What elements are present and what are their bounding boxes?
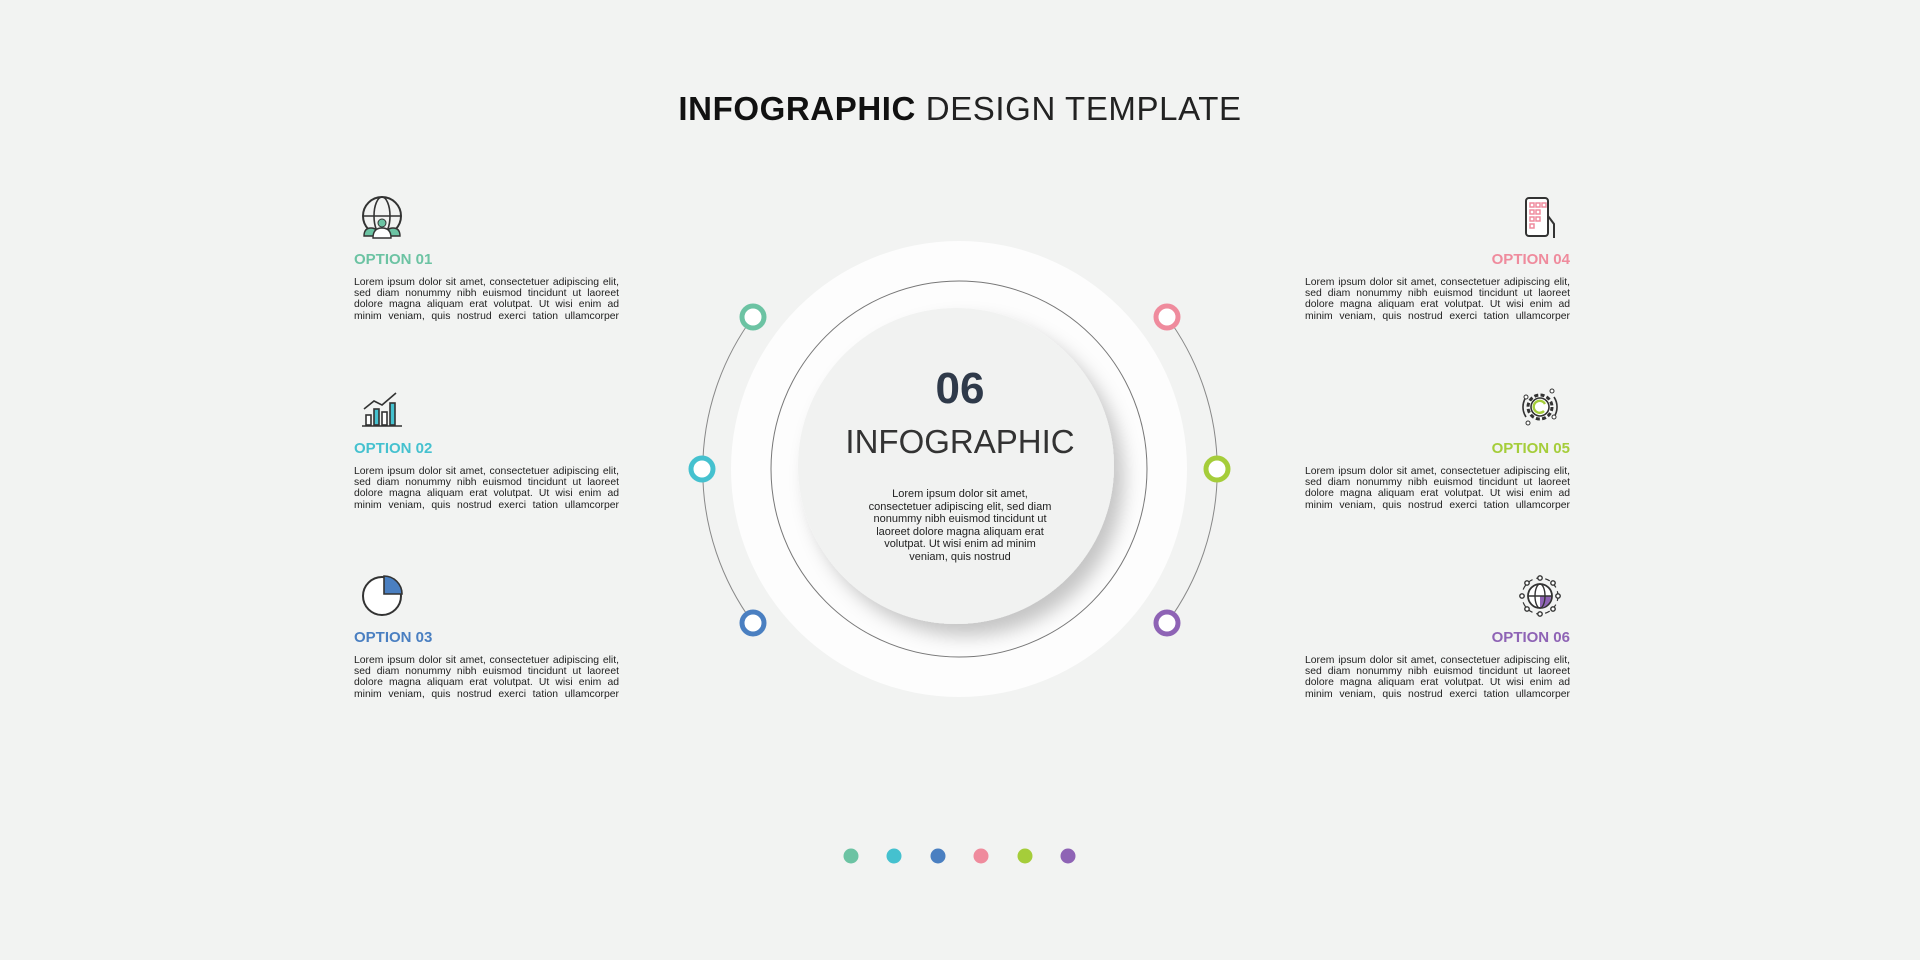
option 02: OPTION 02 xyxy=(354,440,432,457)
option 04: OPTION 04 xyxy=(1492,251,1570,268)
option 01 xyxy=(354,196,619,322)
center number: 06 xyxy=(936,364,984,413)
option 06: OPTION 06 xyxy=(1492,629,1570,646)
dot markers xyxy=(691,306,1228,634)
option 04: Lorem ipsum dolor sit amet, consectetuer adipiscing elit, sed diam nonummy nibh euismod tincidunt ut laoreet dolore magna aliquam erat volutpat. Ut wisi enim ad minim veniam, quis nostrud exerci tation ullamcorper xyxy=(1305,277,1570,322)
inner raised circle xyxy=(798,308,1114,624)
center heading: INFOGRAPHIC xyxy=(845,423,1075,460)
option 02: Lorem ipsum dolor sit amet, consectetuer adipiscing elit, sed diam nonummy nibh euismod tincidunt ut laoreet dolore magna aliquam erat volutpat. Ut wisi enim ad minim veniam, quis nostrud exerci tation ullamcorper xyxy=(354,466,619,511)
icon: bar chart xyxy=(362,392,402,427)
option 05: OPTION 05 xyxy=(1492,440,1570,457)
outer white circle xyxy=(731,241,1187,697)
center body text: Lorem ipsum dolor sit amet, consectetuer adipiscing elit, sed diam nonummy nibh euismod tincidunt ut laoreet dolore magna aliquam erat volutpat. Ut wisi enim ad minim veniam, quis nostrud xyxy=(869,488,1051,563)
arcs xyxy=(703,317,753,623)
icon: globe people xyxy=(362,196,402,239)
option 01: OPTION 01 xyxy=(354,251,432,268)
option 03: Lorem ipsum dolor sit amet, consectetuer adipiscing elit, sed diam nonummy nibh euismod tincidunt ut laoreet dolore magna aliquam erat volutpat. Ut wisi enim ad minim veniam, quis nostrud exerci tation ullamcorper xyxy=(354,655,619,700)
title: INFOGRAPHIC DESIGN TEMPLATE xyxy=(678,90,1242,127)
color legend dots xyxy=(844,848,1076,864)
icon: network globe xyxy=(1519,575,1561,617)
option 03 xyxy=(354,575,619,700)
thin ring xyxy=(771,281,1147,657)
option 03: OPTION 03 xyxy=(354,629,432,646)
option 06: Lorem ipsum dolor sit amet, consectetuer adipiscing elit, sed diam nonummy nibh euismod tincidunt ut laoreet dolore magna aliquam erat volutpat. Ut wisi enim ad minim veniam, quis nostrud exerci tation ullamcorper xyxy=(1305,655,1570,700)
icon: pie chart xyxy=(362,575,403,616)
option 05 xyxy=(1305,388,1570,511)
option 06 xyxy=(1305,575,1570,700)
option 02 xyxy=(354,392,619,511)
icon: gear xyxy=(1522,388,1558,426)
icon: phone keypad xyxy=(1525,197,1555,238)
option 05: Lorem ipsum dolor sit amet, consectetuer adipiscing elit, sed diam nonummy nibh euismod tincidunt ut laoreet dolore magna aliquam erat volutpat. Ut wisi enim ad minim veniam, quis nostrud exerci tation ullamcorper xyxy=(1305,466,1570,511)
option 04 xyxy=(1305,197,1570,322)
option 01: Lorem ipsum dolor sit amet, consectetuer adipiscing elit, sed diam nonummy nibh euismod tincidunt ut laoreet dolore magna aliquam erat volutpat. Ut wisi enim ad minim veniam, quis nostrud exerci tation ullamcorper xyxy=(354,277,619,322)
